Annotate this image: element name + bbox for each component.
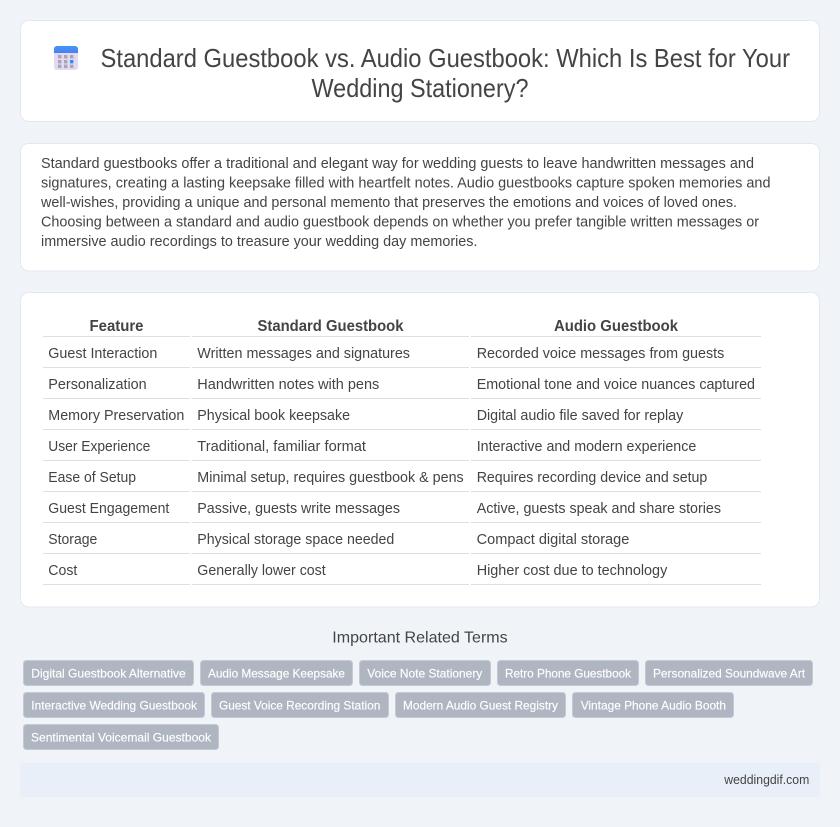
table row: guest engagement: Passive, guests write messages [197,501,400,517]
table row: memory preservation [48,408,684,424]
panel: header [20,20,820,122]
table row: storage: Storage [48,532,97,548]
tag list: related terms: Modern Audio Guest Registry [403,698,558,712]
tag list: related terms: Vintage Phone Audio Booth [581,698,726,712]
text block: introduction paragraph: Standard guestbooks offer a traditional and elegant way for wedding guests to leave handwritten messages and [41,155,754,172]
heading: important related terms: Important Related Terms [332,630,508,647]
panel: introduction [20,144,820,271]
table row: cost: Generally lower cost [197,563,326,579]
icon: calendar [54,46,78,70]
table row: cost [48,563,668,579]
table row: ease of setup: Ease of Setup [48,470,136,486]
table row: ease of setup: Minimal setup, requires guestbook & pens [197,470,464,486]
table row: memory preservation: Memory Preservation [48,408,184,424]
text block: introduction paragraph: immersive audio recordings to treasure your wedding day memories. [41,233,478,250]
table row: personalization: Personalization [48,377,147,393]
table row: storage [48,532,629,548]
table header row: Feature [90,318,144,335]
table row: storage: Compact digital storage [477,532,629,548]
table row: user experience: User Experience [48,439,150,455]
footer [20,763,820,797]
table row: user experience: Interactive and modern experience [477,439,696,455]
tag list: related terms: Retro Phone Guestbook [505,666,632,680]
tag list: related terms: Guest Voice Recording Station [219,698,380,712]
table header row [90,318,678,335]
table row: ease of setup: Requires recording device and setup [477,470,707,486]
text block: introduction paragraph [40,155,771,250]
table row: guest interaction [48,346,724,362]
text block: introduction paragraph: well-wishes, providing a unique and personal memento that preserves the emotions and voices of loved ones. [40,194,737,211]
text block: introduction paragraph: Choosing between a standard and audio guestbook depends on whether you prefer tangible written messages or [41,214,759,230]
table row: memory preservation: Digital audio file saved for replay [477,408,684,424]
title: Standard Guestbook vs. Audio Guestbook: Which Is Best for Your [100,45,790,73]
table row: guest interaction: Written messages and signatures [197,346,410,362]
tag list: related terms: Interactive Wedding Guestbook [31,698,198,712]
table row: personalization: Handwritten notes with pens [197,377,379,393]
title [100,45,790,103]
tag list: related terms: Audio Message Keepsake [208,666,345,680]
table row: cost: Higher cost due to technology [477,563,668,579]
table row: guest engagement [48,501,721,517]
tag list: related terms: Personalized Soundwave Art [653,666,806,680]
title: Wedding Stationery? [312,75,528,103]
table row: guest engagement: Active, guests speak and share stories [477,501,721,517]
table row: ease of setup [48,470,707,486]
text block: introduction paragraph: signatures, creating a lasting keepsake filled with heartfelt notes. Audio guestbooks capture spoken memories and [41,174,770,192]
tag list: related terms: Digital Guestbook Alternative [31,666,186,680]
table row: memory preservation: Physical book keepsake [197,408,350,424]
table row: personalization: Emotional tone and voice nuances captured [477,377,755,393]
table header row: Audio Guestbook [554,318,678,335]
table row: personalization [48,377,755,393]
table row: storage: Physical storage space needed [197,532,394,548]
table row: guest interaction: Recorded voice messages from guests [477,346,724,362]
table header row: Standard Guestbook [258,318,404,335]
table row: cost: Cost [48,563,77,579]
table row: guest interaction: Guest Interaction [48,346,157,362]
tag list: related terms [24,660,812,750]
tag list: related terms: Voice Note Stationery [367,666,482,680]
table row: guest engagement: Guest Engagement [48,501,169,517]
footer: weddingdif.com [723,772,809,787]
panel: comparison table [20,292,820,607]
tag list: related terms: Sentimental Voicemail Guestbook [31,730,212,744]
table row: user experience [48,439,696,455]
table row: user experience: Traditional, familiar format [197,439,366,455]
